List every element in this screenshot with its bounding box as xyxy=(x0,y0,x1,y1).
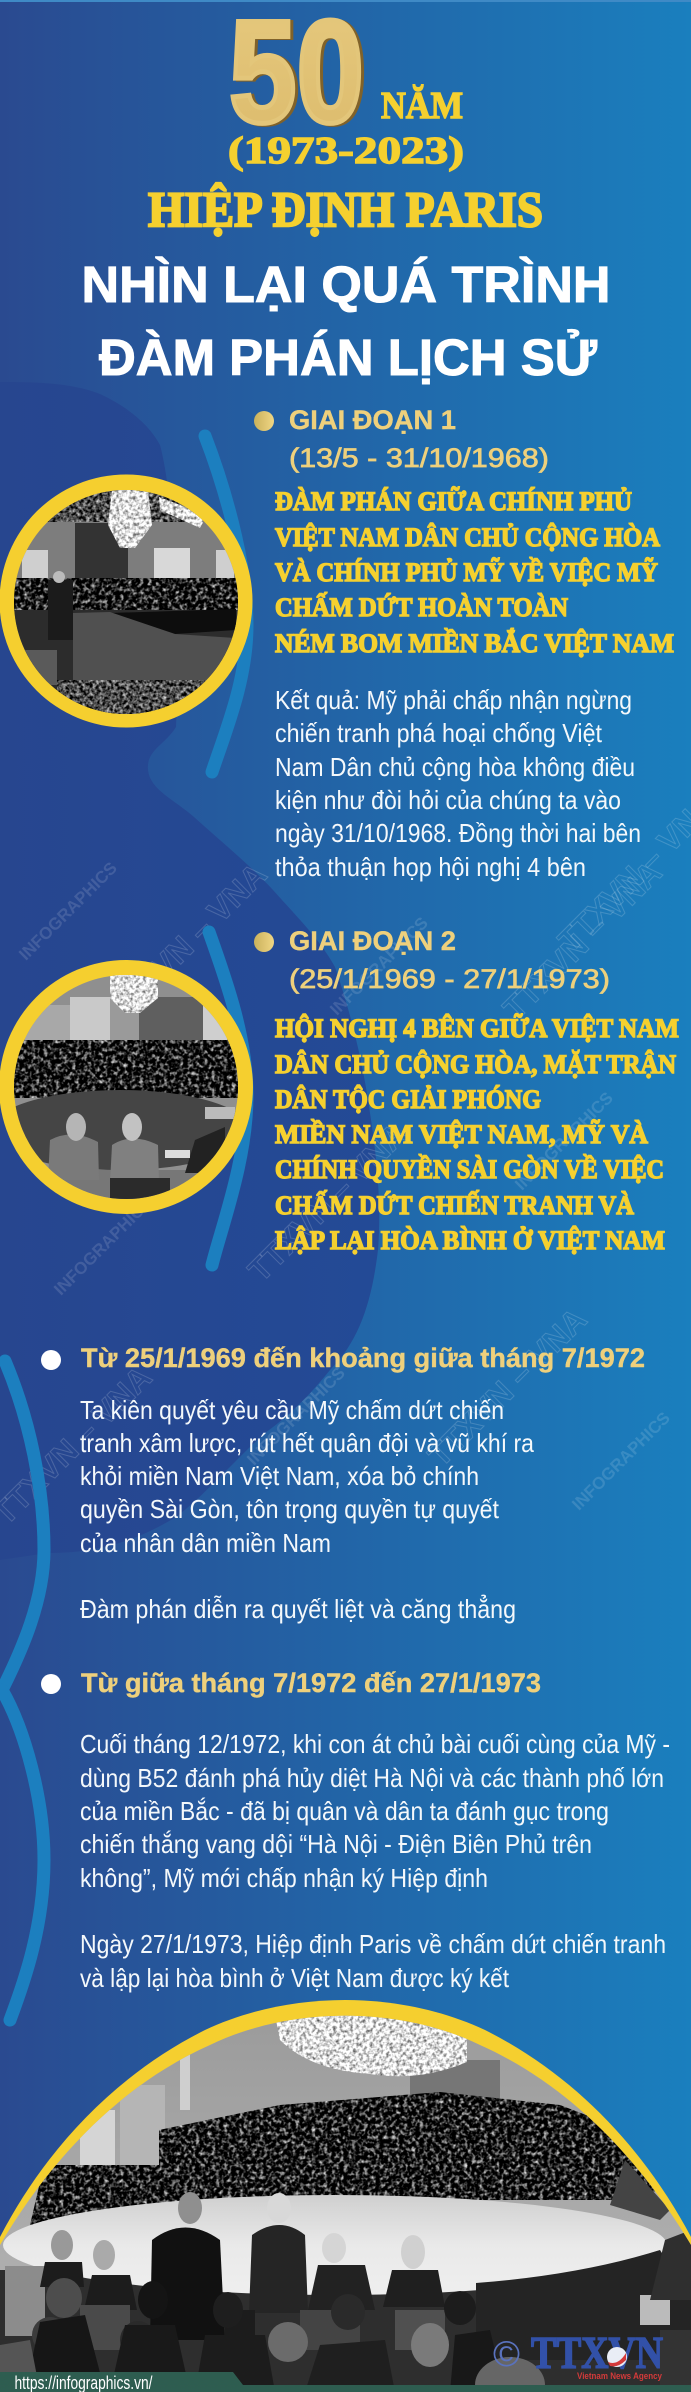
logo: TTXVN: © xyxy=(493,2333,520,2374)
footer bar xyxy=(0,2372,691,2392)
stage 1 result text: thỏa thuận họp hội nghị 4 bên xyxy=(275,852,586,882)
watermarks: INFOGRAPHICS xyxy=(243,1363,349,1469)
period 2 text: của miền Bắc - đã bị quân và dân ta đánh gục trong xyxy=(80,1796,609,1826)
watermarks: INFOGRAPHICS xyxy=(50,1193,156,1299)
title: 50 năm xyxy=(229,0,463,154)
period 1 text: quyền Sài Gòn, tôn trọng quyền tự quyết xyxy=(80,1494,500,1524)
watermarks xyxy=(0,786,691,1531)
period 1 heading: Từ 25/1/1969 đến khoảng giữa tháng 7/1972 xyxy=(81,1343,645,1373)
logo: TTXVN: TTXVN xyxy=(531,2328,663,2378)
photo: stage 1 meeting xyxy=(0,474,252,728)
title: main heading xyxy=(82,256,610,386)
heading: stage 1: (13/5 - 31/10/1968) xyxy=(289,443,549,473)
arc: left bracket upper xyxy=(2,1361,44,1690)
heading: stage 2 xyxy=(254,926,610,994)
period 2 text: không”, Mỹ mới chấp nhận ký Hiệp định xyxy=(80,1863,488,1893)
heading: stage 2: GIAI ĐOẠN 2 xyxy=(289,926,456,956)
watermarks: TTXVN – VNA xyxy=(241,1116,413,1288)
period 1 text: khỏi miền Nam Việt Nam, xóa bỏ chính xyxy=(80,1461,479,1491)
watermarks: INFOGRAPHICS xyxy=(511,1088,617,1194)
stage 1 result text: Kết quả: Mỹ phải chấp nhận ngừng xyxy=(275,685,632,715)
stage 2 subject: LẬP LẠI HÒA BÌNH Ở VIỆT NAM xyxy=(275,1226,665,1255)
stage 1 result text: Nam Dân chủ cộng hòa không điều xyxy=(275,752,635,782)
period 2 text xyxy=(80,1729,670,1993)
stage 2 subject: DÂN TỘC GIẢI PHÓNG xyxy=(275,1085,541,1114)
stage 1 subject: VÀ CHÍNH PHỦ MỸ VỀ VIỆC MỸ xyxy=(275,558,658,587)
period 2 text: chiến thắng vang dội “Hà Nội - Điện Biên Phủ trên xyxy=(80,1829,592,1859)
period 1 text: của nhân dân miền Nam xyxy=(80,1528,331,1558)
arc: stage 2 xyxy=(209,932,247,1265)
period 2 heading: Từ giữa tháng 7/1972 đến 27/1/1973 xyxy=(81,1668,541,1698)
stage 1 result text: ngày 31/10/1968. Đồng thời hai bên xyxy=(275,818,641,848)
stage 1 subject: CHẤM DỨT HOÀN TOÀN xyxy=(275,593,568,622)
stage 2 subject: CHÍNH QUYỀN SÀI GÒN VỀ VIỆC xyxy=(275,1155,664,1184)
stage 1 result text: kiện như đòi hỏi của chúng ta vào xyxy=(275,785,621,815)
title: main heading: NHÌN LẠI QUÁ TRÌNH xyxy=(82,256,610,313)
heading: stage 2: (25/1/1969 - 27/1/1973) xyxy=(289,964,610,994)
period 2 text: và lập lại hòa bình ở Việt Nam được ký kết xyxy=(80,1963,510,1993)
stage 1 result text xyxy=(275,685,641,882)
period 1 text: Đàm phán diễn ra quyết liệt và căng thẳng xyxy=(80,1593,516,1624)
logo: TTXVN xyxy=(493,2328,663,2382)
stage 2 subject: DÂN CHỦ CỘNG HÒA, MẶT TRẬN xyxy=(275,1050,676,1079)
period 1 text: Ta kiên quyết yêu cầu Mỹ chấm dứt chiến xyxy=(80,1395,504,1425)
watermarks: TTXVN – VNA xyxy=(421,1301,593,1473)
title: main heading: ĐÀM PHÁN LỊCH SỬ xyxy=(99,328,598,386)
arc: left bracket lower xyxy=(2,1690,44,2020)
photo: stage 2 meeting xyxy=(0,960,253,1214)
stage 2 subject xyxy=(275,1014,679,1255)
stage 1 subject: NÉM BOM MIỀN BẮC VIỆT NAM xyxy=(275,629,674,658)
title: Hiệp định Paris: HIỆP ĐỊNH PARIS xyxy=(148,181,543,237)
stage 1 subject xyxy=(275,487,674,658)
heading: stage 1 xyxy=(254,405,549,473)
period 1 text: tranh xâm lược, rút hết quân đội và vũ khí ra xyxy=(80,1428,534,1458)
stage 2 subject: MIỀN NAM VIỆT NAM, MỸ VÀ xyxy=(275,1120,648,1149)
watermarks: INFOGRAPHICS xyxy=(568,1408,674,1514)
stage 1 result text: chiến tranh phá hoại chống Việt xyxy=(275,718,603,748)
period 1 text xyxy=(80,1395,534,1624)
photo: signing ceremony dome xyxy=(0,2000,691,2392)
stage 1 subject: ĐÀM PHÁN GIỮA CHÍNH PHỦ xyxy=(275,487,632,516)
arc: stage 1 xyxy=(205,436,247,772)
title: 50 năm: NĂM xyxy=(381,85,463,127)
heading: stage 1: GIAI ĐOẠN 1 xyxy=(289,405,456,435)
title: years: (1973-2023) xyxy=(228,130,464,172)
watermarks: INFOGRAPHICS xyxy=(15,858,121,964)
stage 1 subject: VIỆT NAM DÂN CHỦ CỘNG HÒA xyxy=(275,523,660,552)
watermarks: INFOGRAPHICS xyxy=(326,913,432,1019)
watermarks: TTXVN – VNA xyxy=(496,854,668,1026)
logo: TTXVN: Vietnam News Agency xyxy=(577,2371,663,2382)
stage 2 subject: CHẤM DỨT CHIẾN TRANH VÀ xyxy=(275,1191,634,1220)
watermarks: TTXVN – VNA xyxy=(101,856,273,1028)
stage 2 subject: HỘI NGHỊ 4 BÊN GIỮA VIỆT NAM xyxy=(275,1014,679,1043)
